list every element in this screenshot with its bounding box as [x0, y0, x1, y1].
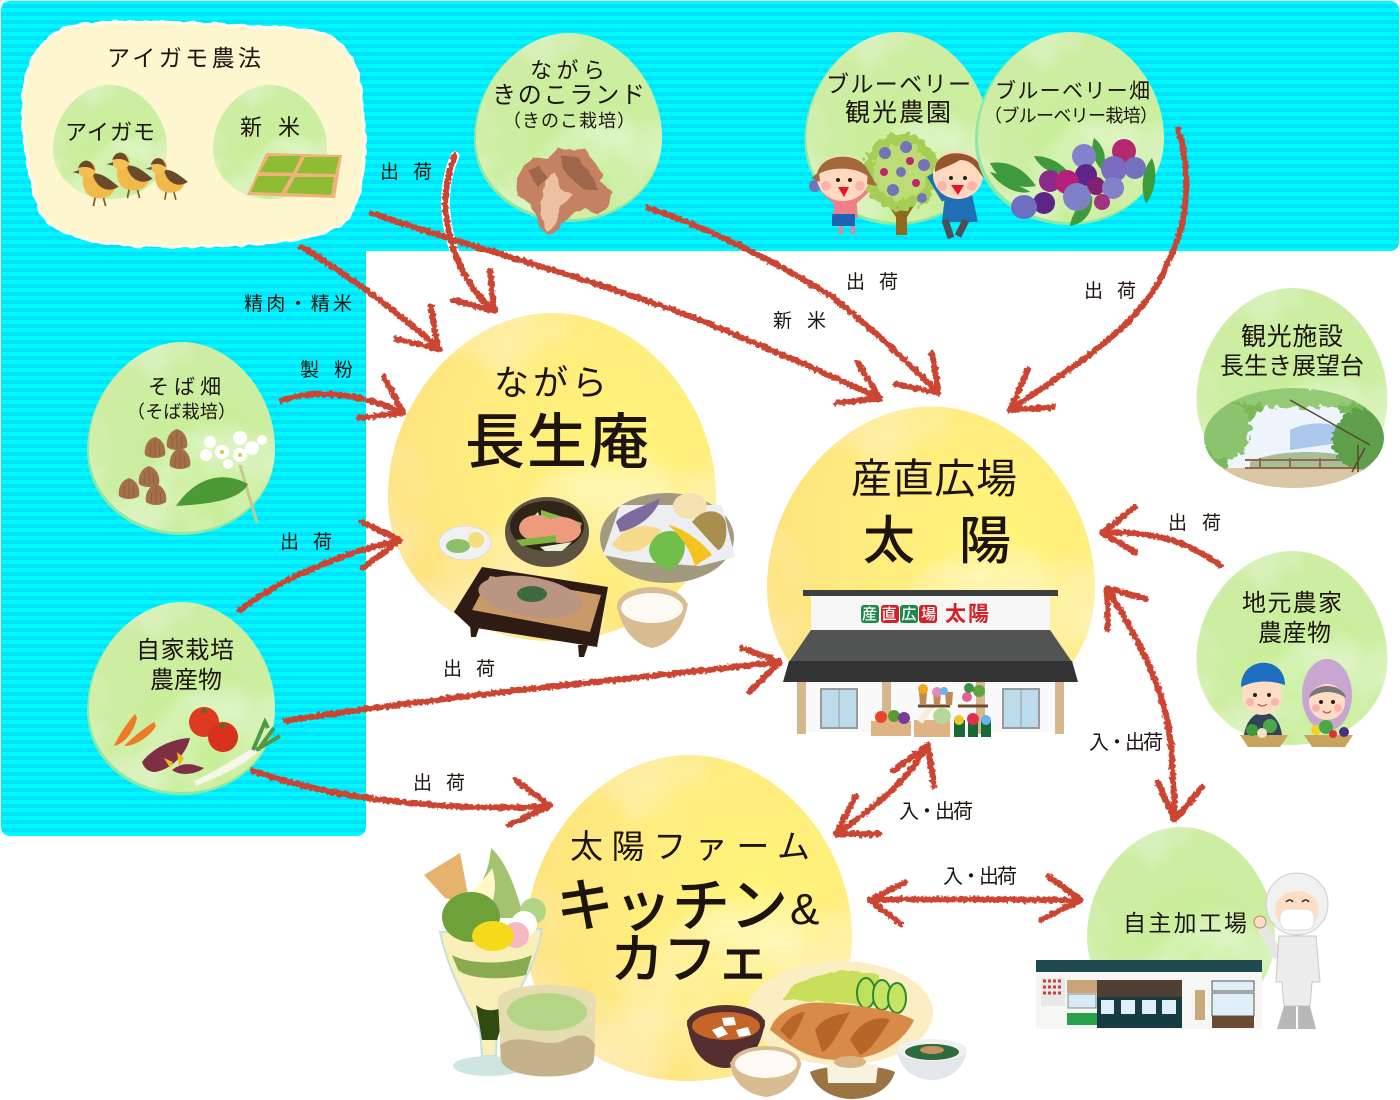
icon: male farmer — [1240, 663, 1288, 747]
heading: Kitchen and Cafe — [556, 874, 819, 990]
arrow: Taiyo and kitchen two-way — [836, 745, 934, 834]
egg: buckwheat field — [87, 342, 275, 535]
label: milling: 製粉 — [300, 359, 353, 381]
arrow: produce to Taiyo — [285, 648, 780, 721]
label: in and out shipping center: 入・出荷 — [899, 800, 973, 823]
vegetable crates — [871, 706, 951, 737]
arrow: Taiyo and processing plant two-way — [1107, 588, 1202, 820]
arrow: buckwheat to Chouseian — [281, 377, 403, 418]
egg: new rice — [213, 85, 342, 199]
egg: aigamo — [53, 85, 188, 206]
egg: mushroom land: ながら — [530, 58, 605, 83]
egg: sightseeing observatory: 長生き展望台 — [1220, 353, 1364, 380]
heading: aigamo farming: アイガモ農法 — [107, 45, 261, 71]
egg: self-run processing plant — [1036, 827, 1328, 1029]
egg: Taiyo direct sales plaza — [767, 406, 1095, 737]
icon: tempura plate — [600, 493, 735, 583]
icon: blueberry bush — [863, 134, 939, 235]
icon: factory worker — [1254, 873, 1328, 1029]
heading: Chouseian: 長生庵 — [465, 409, 649, 476]
heading: Nagara: ながら — [494, 364, 607, 403]
egg: Nagara Chouseian restaurant — [388, 313, 735, 657]
icon: zaru soba tray — [454, 567, 608, 657]
icon: factory building — [1036, 960, 1262, 1029]
icon: maitake mushroom — [517, 147, 612, 236]
icon: matcha parfait — [424, 848, 546, 1076]
store sign: 産直広場 — [862, 606, 936, 623]
heading: Taiyo: 太陽 — [863, 513, 1011, 571]
egg: blueberry field — [975, 32, 1164, 226]
label: shipping blueberry: 出荷 — [1084, 280, 1136, 302]
arrow: mushroom to Taiyo — [648, 208, 939, 393]
icon: rice bowl — [730, 1046, 801, 1097]
egg: buckwheat field: そば畑 — [148, 376, 221, 399]
icon: tofu bowl — [810, 1056, 895, 1099]
icon: female farmer — [1302, 659, 1353, 747]
arrow: local farmers to Taiyo — [1102, 507, 1221, 566]
label: shipping produce to Taiyo: 出荷 — [443, 658, 495, 680]
egg: mushroom land: きのこランド — [492, 82, 645, 109]
egg: blueberry field: ブルーベリー畑 — [995, 80, 1150, 103]
icon: storefront — [783, 590, 1078, 737]
egg: home-grown produce — [87, 602, 280, 795]
heading: Taiyo Farm: 太陽ファーム — [570, 828, 810, 865]
egg: blueberry field: （ブルーベリー栽培） — [984, 105, 1158, 126]
label: meat and rice: 精肉・精米 — [244, 293, 352, 315]
label: shipping local: 出荷 — [1168, 512, 1221, 534]
egg: mushroom land — [474, 33, 662, 236]
icon: rice bowl — [617, 587, 688, 648]
store sign — [861, 603, 989, 626]
label: in and out shipping bottom: 入・出荷 — [943, 865, 1017, 888]
store sign: 太陽 — [945, 603, 989, 626]
egg: blueberry tourist farm: ブルーベリー — [826, 71, 971, 97]
egg: blueberry tourist farm — [804, 32, 990, 238]
panel: aigamo farming — [23, 22, 365, 247]
icon: tree landscape — [1204, 388, 1384, 488]
egg: home-grown produce: 自家栽培 — [136, 637, 234, 664]
label: shipping to Chouseian: 出荷 — [280, 531, 332, 553]
icon: boy — [930, 151, 984, 238]
arrow: new rice to Taiyo — [371, 213, 880, 403]
icon: small condiment plate — [439, 526, 491, 560]
egg: aigamo: アイガモ — [65, 120, 155, 145]
egg: home-grown produce: 農産物 — [150, 667, 222, 694]
heading: Kitchen and Cafe: & — [790, 885, 819, 934]
icon: miso soup — [687, 1005, 765, 1068]
arrow: kitchen and processing plant two-way — [870, 876, 1081, 924]
egg: local farmers produce: 地元農家 — [1242, 590, 1342, 617]
icon: buckwheat flower and leaf — [176, 431, 267, 523]
egg: local farmers produce: 農産物 — [1258, 620, 1331, 647]
arrow: mushroom to Chouseian — [446, 156, 495, 311]
egg: buckwheat field: （そば栽培） — [127, 402, 236, 422]
egg: local farmers produce — [1196, 551, 1388, 747]
label: in and out shipping right: 入・出荷 — [1089, 731, 1163, 754]
icon: rice field — [247, 153, 342, 198]
arrow: produce to Chouseian — [240, 522, 400, 610]
arrow: aigamo to Chouseian — [301, 247, 440, 349]
egg: new rice: 新米 — [240, 115, 300, 140]
icon: buckwheat seeds — [119, 429, 190, 505]
arrow: produce to kitchen — [253, 771, 550, 825]
arrow: blueberry to Taiyo — [1010, 130, 1186, 410]
egg: sightseeing observatory: 観光施設 — [1241, 323, 1343, 351]
egg: blueberry tourist farm: 観光農園 — [845, 99, 951, 127]
label: shipping produce to kitchen: 出荷 — [413, 772, 465, 794]
label: shipping (top): 出荷 — [380, 161, 432, 183]
heading: direct sales plaza: 産直広場 — [851, 456, 1017, 502]
icon: girl — [809, 155, 877, 234]
icon: vegetables — [114, 707, 280, 786]
label: shipping mushroom: 出荷 — [846, 271, 898, 293]
label: new rice: 新米 — [773, 310, 826, 332]
icon: matcha cup — [498, 985, 596, 1076]
icon: ducklings — [73, 153, 188, 206]
icon: side dish greens — [897, 1039, 967, 1080]
heading: Kitchen and Cafe: キッチン — [556, 874, 788, 939]
icon: soup bowl — [505, 497, 589, 567]
egg: sightseeing observatory — [1196, 288, 1392, 490]
egg: Taiyo Farm Kitchen and Cafe — [424, 755, 967, 1099]
icon: blueberries — [990, 138, 1155, 226]
heading: Kitchen and Cafe: カフェ — [610, 930, 770, 990]
egg: self-run processing plant: 自主加工場 — [1123, 910, 1247, 936]
icon: ginger pork plate — [747, 961, 933, 1065]
flower pots — [918, 683, 991, 737]
egg: mushroom land: （きのこ栽培） — [503, 111, 635, 131]
cyan striped background panel — [1, 1, 1399, 836]
